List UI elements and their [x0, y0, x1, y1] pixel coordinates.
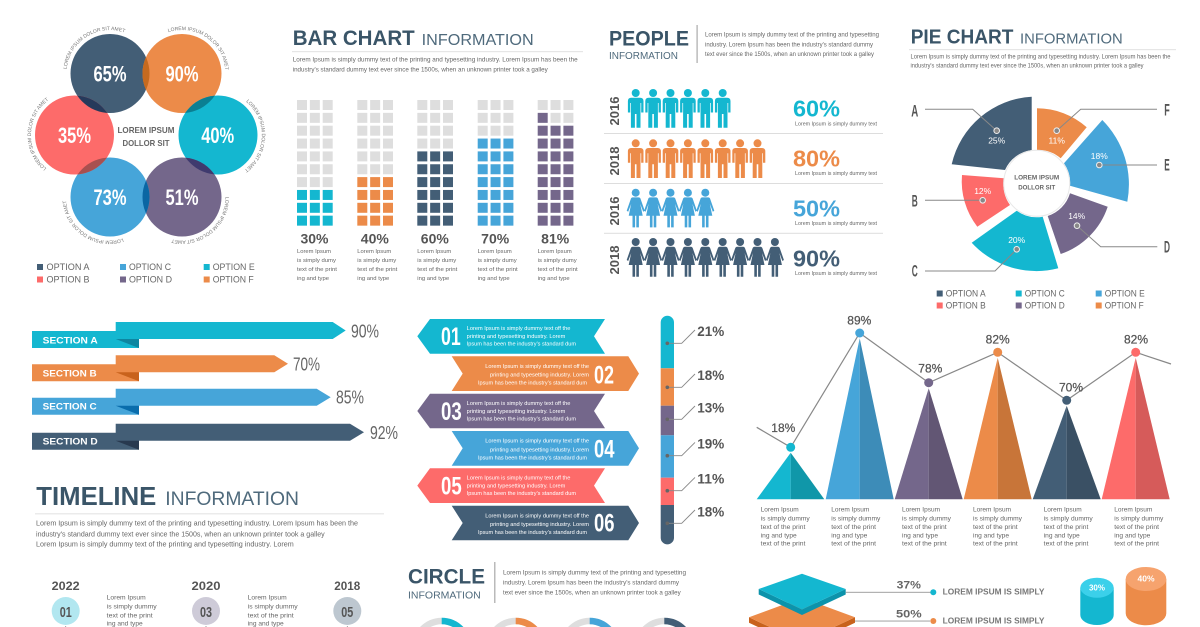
people row: 2016 50%: Lorem Ipsum is simply dummy text — [795, 221, 877, 227]
triangle captions: ing and type — [1044, 533, 1080, 539]
ribbon 05: Ipsum has been the industry's standard dum — [467, 491, 577, 497]
circle percentages: 51% — [166, 185, 198, 210]
triangle captions: text of the print — [902, 542, 947, 548]
panel: pie chart — [909, 26, 1176, 311]
ribbon 06: Ipsum has been the industry's standard dum — [478, 530, 588, 536]
timeline item 2022: 2022 — [52, 579, 80, 593]
pie percentages — [974, 136, 1108, 245]
heading: bar chart: BAR CHART — [293, 27, 415, 50]
triangle captions: text of the print — [761, 542, 806, 548]
legend: venn circles: OPTION D — [129, 275, 172, 285]
people row: 2018 80%: 2018 — [607, 146, 622, 176]
timeline item 2022: 01 — [60, 604, 72, 621]
bar: 81%: 81% — [541, 231, 570, 247]
stacked bar percentages — [697, 323, 725, 519]
triangle captions: Lorem Ipsum — [973, 508, 1011, 514]
curved labels: LOREM IPSUM DOLOR SIT AMET — [168, 26, 229, 70]
bar: 40%: Lorem Ipsum — [357, 249, 392, 255]
panel: stacked bar — [661, 316, 725, 544]
people row: 2018 90% — [607, 238, 877, 277]
text block: timeline intro — [36, 519, 358, 549]
ribbon 02 — [452, 356, 639, 391]
ribbon 02: 02 — [594, 361, 614, 389]
bar: 40% — [357, 100, 398, 282]
trend percentages — [771, 314, 1148, 435]
arrow: section A: 90% — [351, 321, 379, 341]
text block: pie intro: Lorem Ipsum is simply dummy text of the printing and typesetting industry. Lorem Ipsum has been the — [910, 53, 1171, 60]
text block: bar chart intro — [293, 57, 578, 74]
orange layer — [749, 598, 855, 627]
trend percentages: 70% — [1059, 381, 1083, 395]
people row: 2018 90%: 90% — [793, 246, 840, 272]
ribbon 05 — [417, 468, 605, 503]
bar: 30%: text of the print — [297, 267, 337, 273]
text block: circle intro — [503, 569, 686, 597]
triangle captions: is simply dummy — [1044, 516, 1093, 522]
triangle captions: text of the print — [1114, 542, 1159, 548]
legend: venn circles: OPTION E — [213, 262, 255, 272]
ribbon 06: Lorem Ipsum is simply dummy text off the — [485, 513, 589, 519]
timeline item 2022 — [52, 579, 157, 627]
circle percentages: 65% — [94, 62, 126, 86]
leader: 50% — [855, 608, 1045, 626]
timeline item 2020: Lorem Ipsum — [248, 595, 287, 601]
heading: timeline: INFORMATION — [165, 489, 299, 510]
pie percentages: 12% — [974, 186, 992, 196]
stacked bar percentages: 13% — [697, 399, 725, 415]
leader: 37% — [846, 580, 1045, 597]
bar: 40%: text of the print — [357, 267, 398, 273]
arrow: section D — [32, 423, 398, 450]
text block: circle intro: industry. Lorem Ipsum has been the industry's standard dummy — [503, 579, 680, 586]
text block: timeline intro: Lorem Ipsum is simply dummy text of the printing and typesetting industry. Lorem — [36, 540, 294, 549]
triangle captions: is simply dummy — [973, 516, 1022, 522]
panel: timeline — [35, 481, 384, 627]
center label: DOLLOR SIT — [122, 138, 170, 148]
pie letters: C — [912, 262, 918, 281]
ribbon 05: 05 — [441, 472, 462, 500]
text block: circle intro: text ever since the 1500s, when an unknown printer took a galley — [503, 590, 681, 597]
ribbon 04: 04 — [594, 435, 615, 463]
stacked bar percentages: 19% — [697, 435, 725, 451]
pie letters: A — [911, 102, 918, 121]
people row: 2016 50% — [607, 189, 877, 227]
triangle captions: text of the print — [761, 525, 806, 531]
bar: 70%: ing and type — [478, 276, 510, 282]
heading: timeline: TIMELINE — [36, 481, 156, 511]
trend percentages: 82% — [1124, 332, 1148, 346]
people row: 2016 50%: 2016 — [607, 196, 622, 226]
pie letters: E — [1164, 156, 1170, 175]
heading: timeline — [35, 481, 384, 514]
triangle captions — [761, 508, 1163, 548]
heading: pie chart: INFORMATION — [1020, 31, 1123, 47]
triangle captions: text of the print — [973, 525, 1018, 531]
heading: people — [609, 25, 698, 63]
heading: circle: CIRCLE — [408, 565, 485, 588]
ribbon 03: printing and typesetting industry. Lorem — [467, 409, 566, 415]
circle percentages: 40% — [201, 123, 234, 148]
triangle captions: Lorem Ipsum — [761, 508, 799, 514]
text block: people intro: text ever since the 1500s, when an unknown printer took a galley — [705, 51, 875, 58]
text block: timeline intro: Lorem Ipsum is simply dummy text of the printing and typesetting industry. Lorem Ipsum has been the — [36, 519, 358, 528]
arrow: section C: SECTION C — [43, 401, 97, 412]
text block: people intro: industry. Lorem Ipsum has been the industry's standard dummy — [705, 41, 874, 48]
pie center: LOREM IPSUM — [1014, 175, 1060, 182]
arrow: section C — [32, 387, 364, 415]
triangle captions: text of the print — [831, 525, 876, 531]
donut row — [420, 618, 686, 627]
bar: 40%: 40% — [361, 231, 389, 247]
legend: pie chart: OPTION F — [1105, 301, 1144, 311]
people row: 2016 60%: 2016 — [607, 96, 622, 126]
curved labels — [28, 26, 266, 244]
panel: ribbon list — [417, 319, 639, 540]
timeline item 2022: Lorem Ipsum — [107, 595, 146, 601]
pie leaders — [925, 109, 1157, 271]
trend line — [757, 333, 1171, 447]
triangle captions: text of the print — [1044, 542, 1089, 548]
heading: bar chart — [292, 27, 583, 52]
bar: 70%: is simply dumy — [478, 258, 517, 264]
arrow: section C: 85% — [336, 387, 364, 407]
pie letters — [911, 101, 1170, 281]
text block: people intro: Lorem Ipsum is simply dummy text of the printing and typesetting — [705, 32, 879, 39]
bar: 70% — [478, 100, 518, 282]
legend: pie chart: OPTION B — [946, 301, 986, 311]
stacked bar percentages: 18% — [697, 503, 725, 519]
bar: 60%: ing and type — [417, 276, 449, 282]
ribbon 04: Lorem Ipsum is simply dummy text off the — [485, 439, 589, 445]
people row: 2018 90%: Lorem Ipsum is simply dummy text — [795, 271, 877, 277]
circle percentages: 90% — [166, 62, 198, 86]
panel: layered stack — [749, 567, 1166, 627]
heading: people: INFORMATION — [609, 51, 678, 62]
timeline item 2022: text of the print — [107, 614, 153, 620]
triangles — [757, 338, 1170, 499]
panel: pie chart: D — [1164, 238, 1170, 257]
legend: venn circles: OPTION B — [46, 275, 90, 285]
triangle captions: text of the print — [973, 542, 1018, 548]
people row: 2018 90%: 2018 — [607, 245, 622, 274]
ribbon 03 — [417, 394, 605, 428]
triangle captions: Lorem Ipsum — [902, 508, 940, 514]
pie percentages: 11% — [1049, 136, 1065, 146]
bar: 30%: is simply dumy — [297, 258, 336, 264]
panel: bar chart — [292, 27, 583, 282]
curved labels: LOREM IPSUM DOLOR SIT AMET — [246, 99, 266, 173]
triangle captions: text of the print — [902, 525, 947, 531]
triangle captions: ing and type — [761, 533, 797, 539]
bar: 70%: Lorem Ipsum — [478, 249, 512, 255]
arrow: section B: SECTION B — [43, 368, 97, 379]
ribbon 04: printing and typesetting industry. Lorem — [490, 447, 590, 453]
cylinder 30%: 30% — [1089, 584, 1105, 592]
legend: pie chart: OPTION A — [946, 289, 986, 299]
legend: venn circles — [37, 262, 255, 285]
timeline item 2018: 2018 — [334, 579, 361, 593]
pie percentages: 20% — [1008, 235, 1026, 245]
pie letters: B — [912, 192, 918, 211]
ribbon 03: Ipsum has been the industry's standard dum — [467, 416, 577, 422]
heading: pie chart: PIE CHART — [911, 26, 1013, 48]
arrow: section B — [32, 355, 320, 381]
trend percentages: 18% — [771, 421, 796, 435]
bar: 30%: ing and type — [297, 276, 329, 282]
timeline item 2020: text of the print — [248, 614, 294, 620]
heading: circle — [408, 562, 495, 603]
bar: 30%: 30% — [300, 231, 329, 247]
triangle captions: is simply dummy — [831, 516, 880, 522]
heading: circle: INFORMATION — [408, 590, 481, 601]
ribbon 03: Lorem Ipsum is simply dummy text off the — [467, 401, 570, 407]
triangle captions: text of the print — [1044, 525, 1089, 531]
triangle captions: is simply dummy — [761, 516, 810, 522]
timeline item 2022: is simply dummy — [107, 604, 157, 610]
legend: venn circles: OPTION A — [46, 262, 90, 272]
pie center — [1004, 150, 1070, 216]
stacked bar leaders — [667, 330, 695, 523]
ribbon 03: 03 — [441, 398, 462, 426]
people row: 2018 80%: 80% — [793, 146, 840, 172]
trend percentages: 78% — [918, 362, 943, 376]
curved labels: LOREM IPSUM DOLOR SIT AMET — [63, 26, 126, 69]
pie letters: F — [1164, 101, 1170, 120]
curved labels: LOREM IPSUM DOLOR SIT AMET — [28, 97, 48, 171]
bar: 81%: is simply dumy — [538, 258, 577, 264]
bar: 40%: ing and type — [357, 276, 389, 282]
bar: 81% — [538, 100, 578, 282]
people row: 2018 80% — [607, 139, 877, 178]
leader: 37%: LOREM IPSUM IS SIMPLY — [943, 588, 1045, 597]
bar: 60%: Lorem Ipsum — [417, 249, 452, 255]
timeline item 2020 — [192, 579, 298, 627]
panel: section arrows — [32, 321, 398, 450]
timeline item 2018 — [333, 579, 361, 627]
ribbon 01: Ipsum has been the industry's standard dum — [467, 342, 577, 348]
circle percentages — [58, 62, 234, 210]
heading: pie chart — [909, 26, 1176, 50]
text block: people intro — [705, 32, 879, 58]
bar: 60%: text of the print — [417, 267, 458, 273]
trend dots — [786, 328, 1140, 452]
pie center: DOLLOR SIT — [1018, 184, 1055, 191]
triangle captions: Lorem Ipsum — [831, 508, 869, 514]
center label — [118, 125, 174, 148]
ribbon 02: Ipsum has been the industry's standard dum — [478, 381, 588, 387]
text block: timeline intro: industry's standard dummy text ever since the 1500s, when an unknown printer took a galley — [36, 529, 325, 538]
panel: people — [604, 25, 883, 277]
text block: bar chart intro: Lorem Ipsum is simply dummy text of the printing and typesetting industry. Lorem Ipsum has been the — [293, 57, 578, 64]
cylinder 30% — [1080, 578, 1114, 625]
text block: pie intro: industry's standard dummy text ever since the 1500s, when an unknown printer took a galley — [910, 63, 1144, 70]
circle cluster — [35, 34, 258, 236]
leader: 50%: LOREM IPSUM IS SIMPLY — [943, 617, 1045, 626]
ribbon 02: Lorem Ipsum is simply dummy text off the — [485, 364, 589, 370]
timeline item 2020: is simply dummy — [248, 604, 298, 610]
timeline item 2020: 03 — [200, 604, 212, 621]
panel: venn circles — [28, 26, 266, 244]
teal layer — [759, 574, 846, 615]
pie percentages: 18% — [1091, 151, 1108, 161]
people row: 2016 50%: 50% — [793, 196, 840, 222]
panel: triangle chart — [757, 314, 1171, 548]
ribbon 01: 01 — [441, 323, 461, 351]
triangle captions: ing and type — [902, 533, 939, 539]
bar: 60% — [417, 100, 458, 282]
trend percentages: 89% — [847, 314, 872, 328]
bar: 70%: text of the print — [478, 267, 518, 273]
circle percentages: 35% — [58, 123, 91, 148]
triangle captions: Lorem Ipsum — [1114, 508, 1152, 514]
curved labels: LOREM IPSUM DOLOR SIT AMET — [62, 200, 124, 244]
bar: 40%: is simply dumy — [357, 258, 397, 264]
legend: pie chart — [937, 289, 1145, 311]
arrow: section A — [32, 321, 379, 348]
ribbon 01: printing and typesetting industry. Lorem — [467, 334, 566, 340]
bar: 30%: Lorem Ipsum — [297, 249, 331, 255]
arrow: section B: 70% — [293, 355, 320, 375]
curved labels: LOREM IPSUM DOLOR SIT AMET — [171, 197, 229, 244]
bar: 81%: ing and type — [538, 276, 570, 282]
text block: pie intro — [910, 53, 1171, 70]
pie dots — [980, 128, 1102, 252]
timeline item 2018: 05 — [341, 604, 353, 621]
panel: circle information — [408, 562, 686, 627]
ribbon 04 — [452, 431, 639, 466]
text block: bar chart intro: industry's standard dummy text ever since the 1500s, when an unknown printer took a galley — [293, 67, 548, 74]
ribbon 05: Lorem Ipsum is simply dummy text off the — [467, 476, 570, 482]
triangle captions: Lorem Ipsum — [1044, 508, 1082, 514]
text block: circle intro: Lorem Ipsum is simply dummy text of the printing and typesetting — [503, 569, 686, 576]
heading: bar chart: INFORMATION — [422, 32, 534, 49]
people row: 2016 60%: 60% — [793, 96, 840, 122]
stacked bar percentages: 11% — [697, 471, 725, 487]
stacked bar segments — [661, 316, 674, 544]
bar: 70%: 70% — [481, 231, 510, 247]
bar: 60%: is simply dumy — [417, 258, 457, 264]
triangle captions: ing and type — [973, 533, 1010, 539]
timeline item 2020: 2020 — [192, 579, 221, 593]
bar: 81%: text of the print — [538, 267, 578, 273]
legend: pie chart: OPTION E — [1105, 289, 1145, 299]
people row: 2018 80%: Lorem Ipsum is simply dummy text — [795, 171, 877, 177]
ribbon 01: Lorem Ipsum is simply dummy text off the — [467, 326, 570, 332]
legend: venn circles: OPTION F — [213, 275, 254, 285]
triangle captions: is simply dummy — [1114, 516, 1163, 522]
people row: 2016 60%: Lorem Ipsum is simply dummy text — [795, 122, 877, 128]
legend: venn circles: OPTION C — [129, 262, 171, 272]
ribbon 04: Ipsum has been the industry's standard dum — [478, 455, 588, 461]
people row: 2016 60% — [607, 89, 877, 128]
triangle captions: text of the print — [831, 542, 876, 548]
legend: pie chart: OPTION D — [1025, 301, 1065, 311]
leader: 37%: 37% — [897, 580, 921, 592]
triangle captions: ing and type — [1114, 533, 1151, 539]
ribbon 06: 06 — [594, 510, 614, 538]
cylinder 40% — [1126, 567, 1166, 625]
leader: 50%: 50% — [896, 608, 922, 620]
ribbon 01 — [417, 319, 605, 354]
trend percentages: 82% — [986, 332, 1010, 346]
bar: 30% — [297, 100, 337, 282]
arrow: section D: 92% — [370, 423, 398, 443]
ribbon 06: printing and typesetting industry. Lorem — [490, 522, 590, 528]
triangle captions: ing and type — [831, 533, 868, 539]
center label: LOREM IPSUM — [118, 125, 174, 135]
stacked bar dots — [666, 342, 669, 525]
arrow: section A: SECTION A — [43, 335, 98, 346]
legend: pie chart: OPTION C — [1025, 289, 1065, 299]
ribbon 05: printing and typesetting industry. Lorem — [467, 484, 566, 490]
bar: 60%: 60% — [421, 231, 449, 247]
ribbon 06 — [452, 506, 639, 540]
heading: people: PEOPLE — [609, 28, 689, 51]
circle percentages: 73% — [94, 185, 126, 210]
cylinder 40%: 40% — [1137, 574, 1155, 584]
stacked bar percentages: 21% — [697, 323, 725, 339]
ribbon 02: printing and typesetting industry. Lorem — [490, 373, 590, 379]
pie percentages: 14% — [1068, 211, 1086, 221]
triangle captions: text of the print — [1114, 525, 1159, 531]
pie slices — [952, 97, 1129, 271]
pie percentages: 25% — [988, 136, 1006, 146]
arrow: section D: SECTION D — [43, 437, 98, 448]
bar: 81%: Lorem Ipsum — [538, 249, 572, 255]
stacked bar percentages: 18% — [697, 367, 725, 383]
triangle captions: is simply dummy — [902, 516, 951, 522]
